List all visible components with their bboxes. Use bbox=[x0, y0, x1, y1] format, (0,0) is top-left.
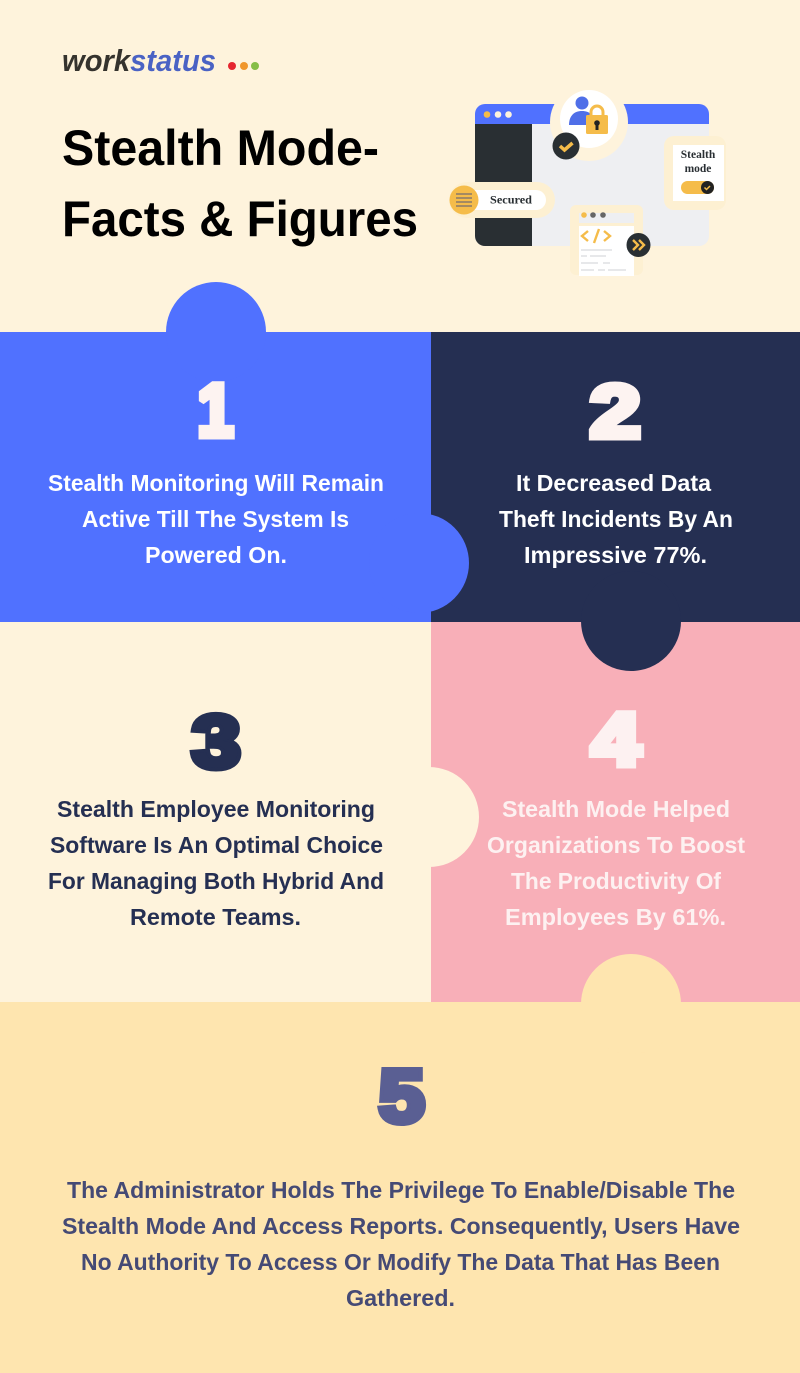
text: panel 5: No Authority To Access Or Modify The Data That Has Been bbox=[81, 1249, 720, 1275]
text: panel 4: Employees By 61%. bbox=[505, 904, 726, 930]
text: panel 1 bbox=[48, 470, 384, 568]
number 5: 5 bbox=[379, 1055, 424, 1138]
secured pill bbox=[449, 182, 555, 218]
text: panel 4: The Productivity Of bbox=[511, 868, 721, 894]
window bbox=[475, 104, 709, 246]
number 3: 3 bbox=[192, 700, 240, 783]
illustration: stealth mode browser window bbox=[449, 83, 726, 276]
text: panel 4: Organizations To Boost bbox=[487, 832, 745, 858]
text: panel 1: Stealth Monitoring Will Remain bbox=[48, 470, 384, 496]
panel 2: navy bbox=[431, 332, 800, 671]
text: panel 4 bbox=[487, 796, 745, 930]
text: panel 1: Powered On. bbox=[145, 542, 287, 568]
panel 4: pink bbox=[431, 622, 800, 1002]
text: panel 2: It Decreased Data bbox=[516, 470, 711, 496]
icon: user with padlock bbox=[550, 83, 628, 161]
text: panel 3: Remote Teams. bbox=[130, 904, 301, 930]
text: panel 5: Stealth Mode And Access Reports. Consequently, Users Have bbox=[62, 1213, 740, 1239]
stealth mode toggle card: Stealth bbox=[681, 149, 716, 161]
panel 3: cream bbox=[0, 622, 479, 1002]
text: panel 5: Gathered. bbox=[346, 1285, 455, 1311]
number 2: 2 bbox=[590, 370, 640, 453]
code card bbox=[570, 205, 650, 276]
title: Facts & Figures bbox=[62, 191, 418, 247]
text: panel 3 bbox=[48, 796, 384, 930]
text: panel 5 bbox=[62, 1177, 740, 1311]
title bbox=[62, 120, 418, 247]
text: panel 2 bbox=[499, 470, 733, 568]
text: panel 3: Stealth Employee Monitoring bbox=[57, 796, 375, 822]
number 1: 1 bbox=[198, 369, 234, 452]
text: panel 1: Active Till The System Is bbox=[82, 506, 349, 532]
icon: check badge bbox=[552, 132, 580, 160]
panel 1: blue bbox=[0, 282, 469, 622]
stealth mode toggle card bbox=[664, 136, 726, 210]
logo: workstatus: workstatus bbox=[62, 43, 216, 78]
text: panel 4: Stealth Mode Helped bbox=[502, 796, 730, 822]
text: panel 3: Software Is An Optimal Choice bbox=[50, 832, 383, 858]
title: Stealth Mode- bbox=[62, 120, 379, 176]
number 4: 4 bbox=[592, 698, 640, 781]
secured pill: Secured bbox=[490, 194, 533, 206]
text: panel 3: For Managing Both Hybrid And bbox=[48, 868, 384, 894]
panel 5: yellow bbox=[0, 954, 800, 1373]
text: panel 2: Impressive 77%. bbox=[524, 542, 707, 568]
text: panel 5: The Administrator Holds The Privilege To Enable/Disable The bbox=[67, 1177, 735, 1203]
stealth mode toggle card: mode bbox=[685, 163, 711, 175]
text: panel 2: Theft Incidents By An bbox=[499, 506, 733, 532]
